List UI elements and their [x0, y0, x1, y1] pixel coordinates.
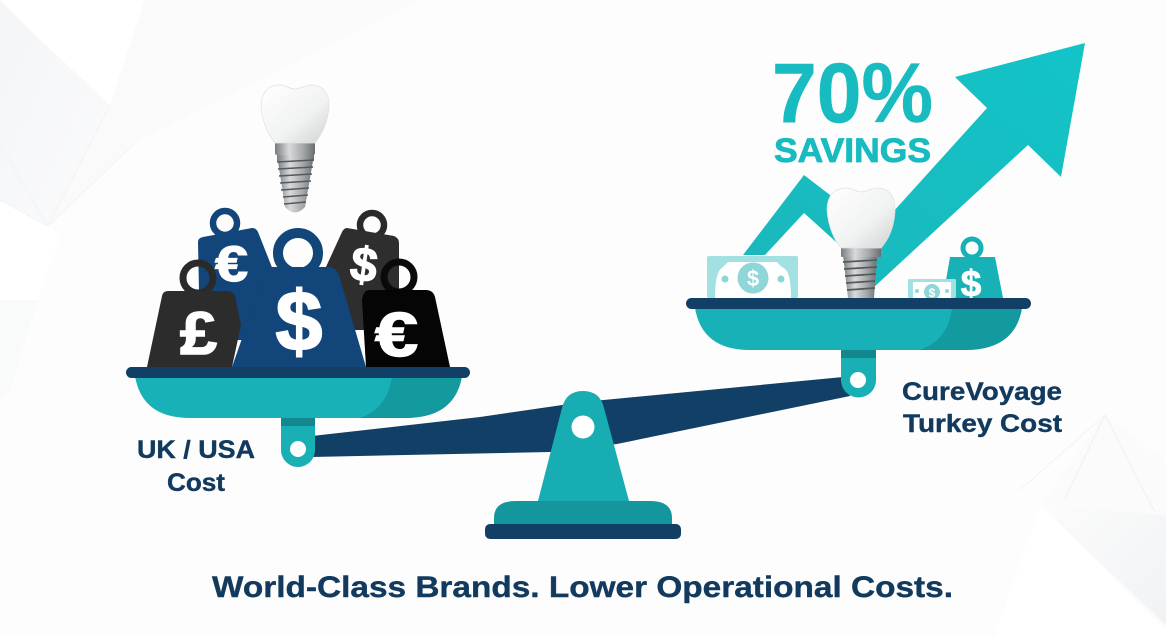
right pan plate — [686, 298, 1031, 309]
small banknote — [908, 279, 956, 300]
right pan bowl — [695, 308, 1022, 350]
weight: front dark pound — [147, 263, 241, 367]
left scale pan — [126, 211, 470, 467]
weight: front black euro — [362, 262, 450, 370]
large banknote — [707, 256, 798, 298]
right pan lug — [841, 348, 876, 398]
weight: front navy dollar: $ — [276, 274, 322, 368]
left pan plate — [126, 367, 470, 378]
weight: back dark dollar — [320, 213, 399, 330]
small teal weight — [943, 239, 1003, 304]
label: CureVoyage Turkey cost: CureVoyage — [902, 378, 1062, 406]
floating dental implant — [261, 85, 329, 212]
weight: back navy euro: € — [215, 236, 248, 292]
left pan bowl — [135, 376, 462, 418]
label: CureVoyage Turkey cost — [902, 378, 1063, 438]
label: UK / USA cost: Cost — [167, 469, 226, 497]
weight: back dark dollar: $ — [347, 237, 381, 294]
label: UK / USA cost: UK / USA — [137, 436, 255, 464]
70% savings text: SAVINGS — [774, 132, 931, 170]
weight: front dark pound: £ — [180, 300, 217, 367]
label: UK / USA cost — [137, 436, 255, 497]
small banknote: $ — [929, 286, 936, 300]
pan dental implant — [827, 188, 895, 298]
weight: front black euro: € — [375, 301, 418, 370]
label: CureVoyage Turkey cost: Turkey Cost — [903, 410, 1063, 438]
large banknote: $ — [747, 266, 759, 291]
small teal weight: $ — [961, 263, 982, 304]
left pan lug — [281, 416, 315, 467]
weight: front navy dollar — [232, 233, 366, 368]
scale beam — [312, 377, 850, 457]
footer headline: World-Class Brands. Lower Operational Costs. — [212, 571, 953, 604]
right scale pan — [686, 188, 1031, 398]
fulcrum stand — [485, 391, 681, 539]
70% savings text: 70% — [772, 46, 933, 140]
savings arrow — [743, 43, 1085, 298]
weight: back navy euro — [198, 211, 275, 340]
